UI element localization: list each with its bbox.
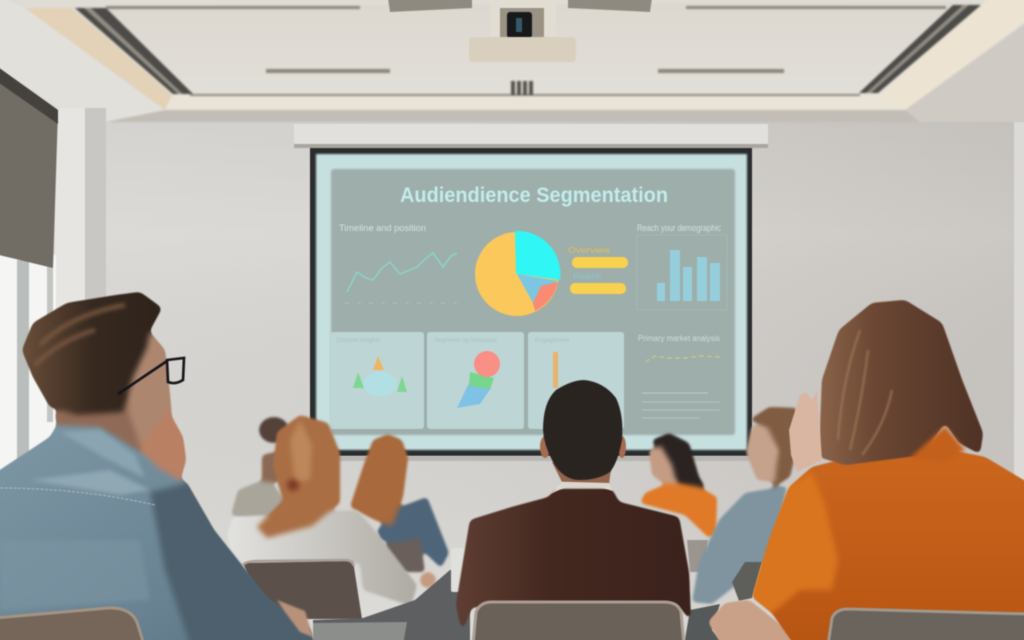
pie chart: [475, 231, 560, 316]
window blind: [0, 65, 58, 268]
hair strands: [838, 330, 892, 455]
line chart: Timeline and position: [339, 223, 426, 233]
neck, face, shirt and hair shapes: [0, 292, 318, 640]
screen frame: [310, 148, 752, 456]
shirt collar: [910, 426, 965, 462]
collar: [550, 482, 613, 494]
small chair right: [732, 562, 762, 601]
neck: [552, 462, 612, 484]
line chart: [339, 223, 458, 303]
shirt: [752, 448, 1024, 640]
ceiling: [0, 0, 1024, 122]
window: [0, 255, 56, 470]
dashboard panel 2: Segments by behaviour: [434, 338, 497, 344]
man with glasses: [0, 292, 318, 640]
cove light trim: [25, 0, 1024, 110]
bar chart: Reach your demographic: [637, 223, 721, 233]
woman in gray top: [692, 407, 797, 604]
middle chair: [243, 560, 362, 619]
dashboard panel 2: [427, 332, 524, 429]
dashboard notes block: [638, 334, 720, 418]
return air grille: [511, 81, 533, 95]
front left chair: [0, 608, 145, 640]
glasses: [118, 358, 184, 394]
man in brown suit: [456, 380, 691, 632]
pie legend: [568, 246, 628, 294]
table: [313, 548, 725, 640]
right table section: [684, 604, 725, 640]
pie legend: Overview: [568, 246, 610, 255]
woman with ginger hair: [227, 415, 436, 606]
ears: [540, 436, 626, 458]
woman in orange shirt: [708, 300, 1024, 640]
center front chair: [472, 601, 684, 640]
screen housing: [294, 124, 768, 148]
ceiling side vents: [75, 5, 981, 94]
dashboard panel 3: Engagement: [535, 338, 569, 344]
bar chart: [637, 223, 727, 310]
pie legend: Reach: [573, 272, 601, 281]
front right chair: [827, 608, 1024, 640]
dashboard panel 1: [330, 332, 424, 429]
presenter-side woman in orange sweater: [640, 433, 717, 538]
long brown hair: [819, 300, 983, 465]
screen shadow ledge: [310, 456, 752, 461]
laptop: [313, 622, 407, 640]
background chair right: [687, 540, 708, 572]
suit: [456, 489, 691, 632]
man's hand on table: [277, 600, 313, 637]
hair: [543, 380, 622, 480]
hair highlights: [35, 305, 125, 365]
projection screen: [310, 148, 752, 456]
shirt highlights and seam: [0, 430, 150, 610]
screen surface: [316, 154, 747, 450]
far woman with blue jacket: [350, 434, 449, 572]
screen title: Audiendience Segmentation: [400, 182, 668, 207]
forearm: [708, 600, 812, 640]
far audience group: [227, 415, 449, 606]
left wall pillar and window: [0, 65, 106, 470]
dashboard panel 1: Channel insights: [336, 338, 380, 344]
background man: [231, 417, 289, 525]
raised hand: [789, 391, 822, 472]
ceiling slot diffusers: [106, 6, 946, 73]
projector: [388, 0, 652, 62]
paper cup: [451, 548, 466, 592]
dashboard notes block: Primary market analysis: [638, 334, 720, 343]
dashboard panel 3: [528, 332, 624, 429]
right wall strip: [1014, 122, 1024, 492]
